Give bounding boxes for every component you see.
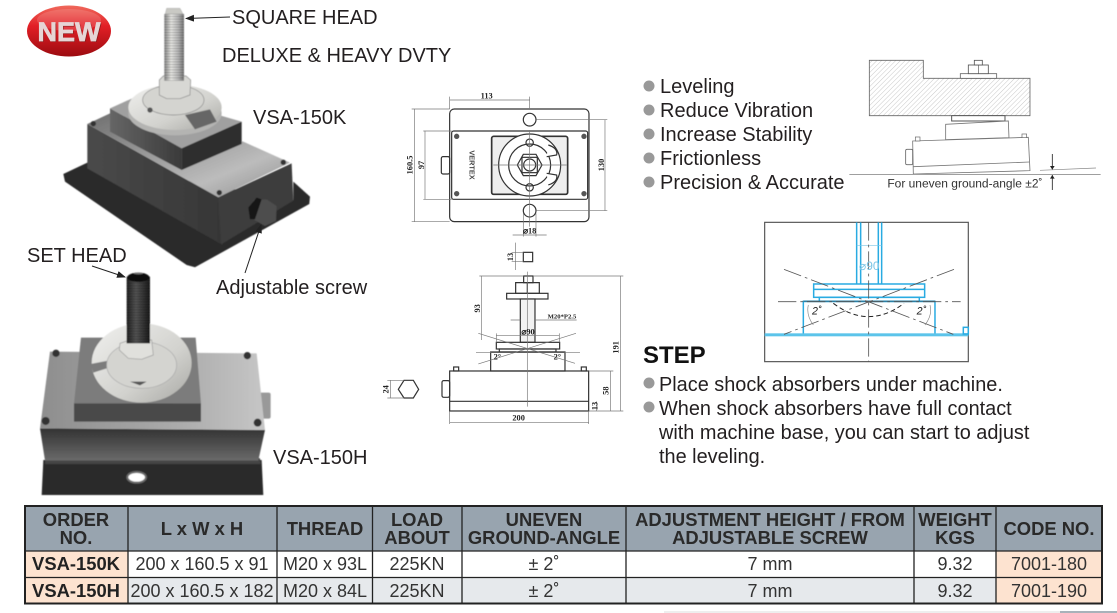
diagram: top view drawing: VERTEX <box>467 150 476 180</box>
diagram: side view drawing: 191 <box>612 341 621 354</box>
table row: VSA-150K <box>32 553 1087 574</box>
table header: WEIGHT <box>918 509 993 530</box>
table header: ABOUT <box>384 527 450 548</box>
diagram: angle detail: 2˚ <box>811 306 822 318</box>
diagram: side view drawing: 200 <box>512 414 525 423</box>
table row: VSA-150K: VSA-150K <box>32 553 121 574</box>
list: step instructions: When shock absorbers have full contact <box>659 398 1012 420</box>
table row: VSA-150H: 9.32 <box>937 581 973 601</box>
label: set head: SET HEAD <box>27 245 127 267</box>
list: step instructions: the leveling. <box>659 446 765 468</box>
diagram: side view drawing: 2° <box>554 352 561 361</box>
diagram: uneven ground angle: For uneven ground-angle ±2˚ <box>887 176 1042 190</box>
list: step instructions: Place shock absorbers under machine. <box>659 374 1003 396</box>
photo: VSA-150H shock absorber <box>40 272 271 495</box>
heading: step: STEP <box>643 342 706 369</box>
diagram: angle detail <box>765 222 968 362</box>
diagram: top view drawing: ⌀18 <box>523 227 536 236</box>
table header: NO. <box>60 527 92 548</box>
table header: LOAD <box>391 509 443 530</box>
table row: VSA-150K: 7001-180 <box>1011 554 1087 574</box>
table row: VSA-150H: 7 mm <box>748 581 792 601</box>
table header: GROUND-ANGLE <box>468 527 620 548</box>
table row: VSA-150K: 9.32 <box>937 554 973 574</box>
list: step instructions: with machine base, you can start to adjust <box>658 422 1030 444</box>
diagram: top view drawing: 97 <box>417 161 426 169</box>
icon: NEW badge: NEW <box>38 17 101 47</box>
list: feature bullets: Frictionless <box>660 148 761 170</box>
diagram: side view drawing: 2° <box>494 352 501 361</box>
table header: CODE NO. <box>1004 518 1094 539</box>
diagram: side view drawing <box>381 243 623 424</box>
diagram: uneven ground angle <box>849 60 1101 190</box>
table row: VSA-150H <box>32 580 1087 601</box>
diagram: angle detail: 2˚ <box>916 306 927 318</box>
diagram: side view drawing: M20*P2.5 <box>548 314 577 321</box>
table row: VSA-150K: ± 2˚ <box>529 554 559 574</box>
diagram: top view drawing: 130 <box>597 159 606 171</box>
diagram: top view drawing: 113 <box>481 92 493 101</box>
diagram: angle detail: ⌀90 <box>859 259 880 273</box>
table row: VSA-150H: 225KN <box>389 581 445 601</box>
list: feature bullets: Leveling <box>660 76 735 98</box>
table row: VSA-150H: M20 x 84L <box>283 581 367 601</box>
table row: VSA-150K: 7 mm <box>748 554 792 574</box>
table header: UNEVEN <box>506 509 582 530</box>
table header: THREAD <box>287 518 363 539</box>
table row: VSA-150H: VSA-150H <box>32 580 120 601</box>
table header: ORDER <box>43 509 109 530</box>
list: feature bullets <box>644 76 845 194</box>
table header: ADJUSTABLE SCREW <box>672 527 869 548</box>
diagram: side view drawing: 13 <box>590 402 599 410</box>
list: step instructions <box>644 374 1030 468</box>
label: deluxe and heavy duty: DELUXE & HEAVY DVTY <box>222 45 451 67</box>
table header: L x W x H <box>161 518 243 539</box>
table row: VSA-150H: 200 x 160.5 x 182 <box>130 581 274 601</box>
diagram: side view drawing: ⌀90 <box>521 327 535 336</box>
diagram: top view drawing: 160.5 <box>406 156 415 174</box>
table header: ADJUSTMENT HEIGHT / FROM <box>635 509 905 530</box>
table: specifications <box>24 506 1102 604</box>
table row: VSA-150K: 200 x 160.5 x 91 <box>135 554 269 574</box>
diagram: side view drawing: 24 <box>381 384 390 393</box>
arrow: adjustable screw pointer <box>245 225 261 273</box>
diagram: side view drawing: 93 <box>473 304 482 312</box>
list: feature bullets: Precision & Accurate <box>660 172 845 194</box>
list: feature bullets: Increase Stability <box>660 124 812 146</box>
label: square head: SQUARE HEAD <box>232 7 378 29</box>
diagram: top view drawing <box>406 92 607 237</box>
diagram: side view drawing: 13 <box>506 253 515 261</box>
arrow: set head pointer <box>92 266 125 277</box>
table row: VSA-150H: 7001-190 <box>1011 581 1087 601</box>
table header: KGS <box>935 527 975 548</box>
photo: VSA-150K shock absorber <box>63 8 310 267</box>
table row: VSA-150H: ± 2˚ <box>529 581 559 601</box>
list: feature bullets: Reduce Vibration <box>660 100 813 122</box>
label: VSA-150K: VSA-150K <box>253 107 347 129</box>
table row: VSA-150K: 225KN <box>389 554 445 574</box>
arrow: square head pointer <box>186 17 230 18</box>
label: VSA-150H: VSA-150H <box>273 447 368 469</box>
diagram: side view drawing: 58 <box>602 386 611 395</box>
label: adjustable screw: Adjustable screw <box>216 277 368 299</box>
table row: VSA-150K: M20 x 93L <box>283 554 367 574</box>
icon: NEW badge: NEW <box>38 18 102 48</box>
icon: NEW badge <box>27 6 111 56</box>
table header <box>43 509 1094 548</box>
